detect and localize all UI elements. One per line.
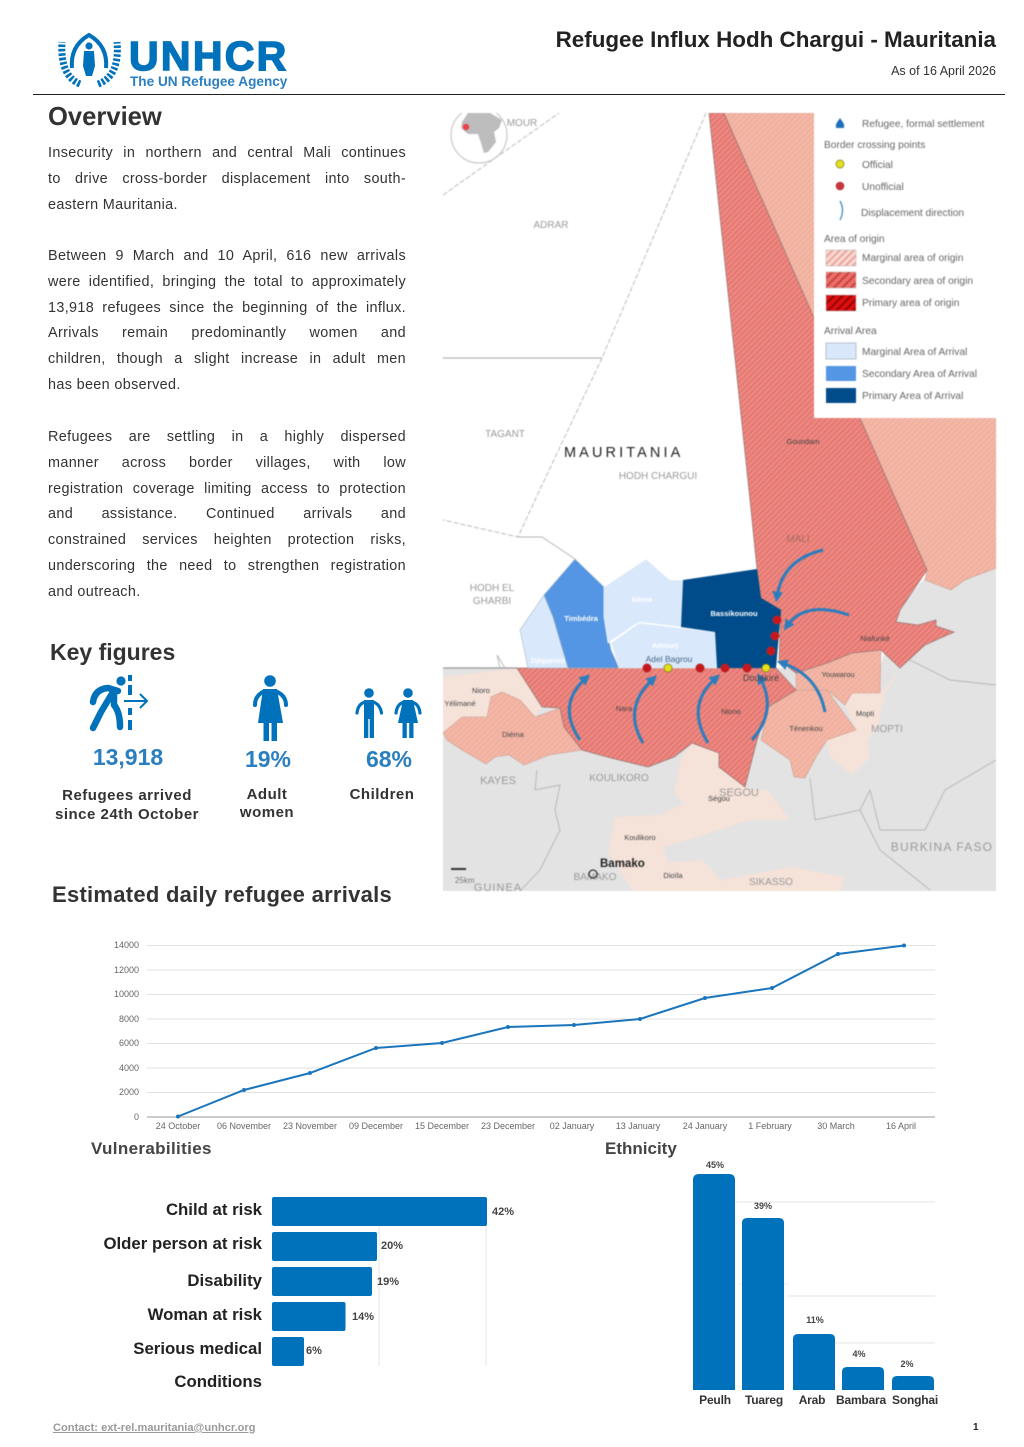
line chart: estimated daily arrivals: 09 December — [349, 1121, 403, 1131]
bar chart: vulnerabilities: Disability — [187, 1271, 263, 1290]
map: unofficial crossing points — [643, 616, 781, 672]
bar chart: vulnerabilities: 42% — [492, 1206, 514, 1218]
bar chart: ethnicity: Songhai — [892, 1393, 938, 1407]
map: Yélimané — [444, 699, 476, 708]
map: Diéma — [502, 730, 525, 739]
figure: 19%: 19% — [245, 746, 291, 772]
bar chart: vulnerabilities: Serious medical — [133, 1339, 262, 1358]
bar chart: ethnicity: Peulh — [699, 1393, 731, 1407]
bar chart: vulnerabilities: Woman at risk — [148, 1305, 263, 1324]
icon: children — [355, 688, 422, 738]
map: Ténenkou — [789, 724, 823, 733]
map legend: Primary area of origin — [862, 298, 959, 309]
text: overview paragraph 2: children, though a slight increase in adult men — [48, 351, 406, 367]
bar chart: vulnerabilities: 6% — [306, 1345, 322, 1357]
line chart: estimated daily arrivals: 12000 — [114, 965, 139, 975]
label: adult women: Adult — [247, 786, 287, 803]
line chart: estimated daily arrivals: 6000 — [119, 1038, 139, 1048]
map: Douékiré — [743, 673, 779, 683]
bar chart: ethnicity: 45% — [706, 1160, 724, 1170]
map: Dioïla — [663, 871, 683, 880]
map legend: Marginal Area of Arrival — [862, 347, 967, 358]
bar chart: vulnerabilities: Older person at risk — [103, 1234, 263, 1253]
map: place labels: GHARBI — [473, 596, 511, 607]
line chart: estimated daily arrivals: 1 February — [748, 1121, 792, 1131]
text: overview paragraph 1: Insecurity in northern and central Mali continues — [48, 145, 406, 161]
map: place labels: SEGOU — [719, 787, 759, 799]
map: Nioro — [472, 686, 490, 695]
map legend: Official — [862, 160, 893, 171]
heading: overview: Overview — [48, 103, 162, 131]
text: overview paragraph 3: registration coverage limiting access to protection — [48, 480, 406, 496]
heading: estimated daily refugee arrivals: Estimated daily refugee arrivals — [52, 882, 392, 907]
label: refugees arrived: since 24th October — [55, 806, 199, 823]
text: overview paragraph 3: and outreach. — [48, 584, 141, 600]
map: Bamako marker — [589, 858, 645, 878]
map: Timbédra — [564, 614, 599, 623]
footer: contact: Contact: ext-rel.mauritania@unhcr.org — [53, 1422, 256, 1434]
map: place labels: SIKASSO — [749, 877, 793, 888]
label: refugees arrived — [55, 787, 199, 823]
map: place labels: KOULIKORO — [589, 773, 649, 784]
map legend: Secondary Area of Arrival — [862, 369, 977, 380]
map: boundaries — [443, 113, 996, 891]
line chart: estimated daily arrivals: 24 October — [156, 1121, 200, 1131]
line chart: estimated daily arrivals: 8000 — [119, 1014, 139, 1024]
bar chart: ethnicity: Bambara — [836, 1393, 886, 1407]
heading: key figures: Key figures — [50, 639, 175, 665]
map: place labels: MOUR — [507, 118, 537, 129]
map: arrival areas — [520, 595, 568, 668]
line chart: estimated daily arrivals: 2000 — [119, 1087, 139, 1097]
text: overview paragraph 3: constrained services heighten protection risks, — [48, 532, 406, 548]
map: displacement arrows — [569, 550, 849, 743]
map: Néma — [632, 595, 653, 604]
line chart: estimated daily arrivals: 10000 — [114, 989, 139, 999]
line chart: estimated daily arrivals: 24 January — [683, 1121, 728, 1131]
map legend — [814, 113, 996, 418]
map: Koulikoro — [624, 833, 656, 842]
line chart: estimated daily arrivals: 16 April — [886, 1121, 916, 1131]
text: overview paragraph 3: Refugees are settling in a highly dispersed — [48, 429, 406, 445]
map: place labels: GUINEA — [474, 882, 522, 894]
map: Adel Bagrou — [646, 654, 693, 664]
icon: refugee crossing border — [90, 675, 148, 732]
bar chart: ethnicity — [693, 1160, 938, 1407]
line chart: estimated daily arrivals: 23 December — [481, 1121, 535, 1131]
date: As of 16 April 2026 — [891, 64, 996, 78]
map: place labels: MOPTI — [871, 724, 903, 735]
title: Refugee Influx Hodh Chargui - Mauritania — [556, 27, 996, 52]
logo tagline: The UN Refugee Agency — [130, 74, 287, 89]
line chart: estimated daily arrivals: 0 — [134, 1112, 139, 1122]
text: overview paragraph 1: eastern Mauritania. — [48, 196, 178, 212]
icon: woman — [253, 675, 288, 741]
figure: 13,918: 13,918 — [93, 744, 163, 770]
text: overview paragraph 3: and assistance. Continued arrivals and — [48, 506, 406, 522]
bar chart: vulnerabilities: Conditions — [174, 1372, 262, 1391]
text: overview paragraph 2: were identified, bringing the total to approximately — [48, 274, 406, 290]
logo: UNHCR — [58, 32, 289, 89]
line chart: estimated daily arrivals: 15 December — [415, 1121, 469, 1131]
bar chart: vulnerabilities: 14% — [352, 1311, 374, 1323]
map legend: Area of origin — [824, 234, 885, 245]
map: Ségou — [708, 794, 730, 803]
text: overview paragraph 1: to drive cross-border displacement into south- — [48, 171, 406, 187]
map: place labels: TAGANT — [485, 429, 525, 440]
bar chart: vulnerabilities — [103, 1197, 514, 1391]
map: place labels: BAMAKO — [574, 872, 617, 883]
map: official crossing points — [664, 664, 770, 672]
line chart: estimated daily arrivals — [114, 940, 935, 1131]
map: Bassikounou — [710, 609, 758, 618]
map: place labels: KAYES — [480, 775, 516, 787]
text: overview paragraph 2 — [48, 248, 406, 393]
map: locator globe — [451, 107, 507, 163]
label: refugees arrived: Refugees arrived — [62, 787, 192, 804]
line chart: estimated daily arrivals: 06 November — [217, 1121, 271, 1131]
bar chart: ethnicity: 4% — [852, 1349, 866, 1359]
map — [442, 112, 997, 892]
map legend: Primary Area of Arrival — [862, 391, 963, 402]
map: scale bar — [451, 868, 475, 885]
map: place labels — [470, 118, 993, 894]
line chart: estimated daily arrivals: 13 January — [616, 1121, 661, 1131]
map legend: Border crossing points — [824, 140, 925, 151]
map: place labels: HODH EL — [470, 583, 515, 594]
bar chart: ethnicity: Tuareg — [745, 1393, 783, 1407]
map legend: Secondary area of origin — [862, 276, 973, 287]
map: place labels: BURKINA FASO — [891, 840, 993, 854]
text: overview paragraph 2: has been observed. — [48, 377, 181, 393]
label: adult women — [240, 786, 294, 821]
map: Goundam — [787, 437, 819, 446]
map: Mopti — [856, 709, 875, 718]
label: children: Children — [350, 786, 414, 803]
map: Youwarou — [821, 670, 855, 679]
footer: page number: 1 — [973, 1422, 979, 1433]
map: place labels: HODH CHARGUI — [619, 471, 697, 482]
map: grey neighbouring land — [443, 560, 996, 891]
map: Amourj — [652, 641, 678, 650]
map: Bamako marker: Bamako — [600, 858, 645, 870]
map: secondary area of origin — [517, 113, 954, 787]
figure: 68%: 68% — [366, 746, 412, 772]
icon: UNHCR emblem — [58, 32, 121, 88]
bar chart: ethnicity: Arab — [799, 1393, 825, 1407]
map: scale bar: 25km — [455, 876, 475, 885]
map: Niafunké — [860, 634, 890, 643]
bar chart: ethnicity: 2% — [900, 1359, 914, 1369]
text: overview paragraph 3 — [48, 429, 406, 600]
map: place labels: ADRAR — [533, 220, 569, 231]
text: overview paragraph 1 — [48, 145, 406, 212]
label: adult women: women — [240, 804, 294, 821]
heading: ethnicity: Ethnicity — [605, 1139, 677, 1158]
text: overview paragraph 2: Between 9 March and 10 April, 616 new arrivals — [48, 248, 406, 264]
map legend: Displacement direction — [861, 208, 964, 219]
map: Djiguenni — [531, 656, 565, 665]
line chart: estimated daily arrivals: 02 January — [550, 1121, 595, 1131]
bar chart: vulnerabilities: 20% — [381, 1240, 403, 1252]
map legend: Marginal area of origin — [862, 253, 963, 264]
bar chart: vulnerabilities: 19% — [377, 1276, 399, 1288]
line chart: estimated daily arrivals: 4000 — [119, 1063, 139, 1073]
map: light peach regions — [443, 668, 900, 891]
text: overview paragraph 2: Arrivals remain predominantly women and — [48, 325, 406, 341]
text: overview paragraph 2: 13,918 refugees since the beginning of the influx. — [48, 300, 406, 316]
text: overview paragraph 3: underscoring the need to strengthen registration — [48, 558, 406, 574]
map legend: Unofficial — [862, 182, 904, 193]
map: MAURITANIA — [564, 445, 683, 461]
line chart: estimated daily arrivals: 30 March — [817, 1121, 855, 1131]
logo wordmark: UNHCR — [129, 33, 289, 79]
map: marginal area of origin — [443, 113, 996, 778]
bar chart: ethnicity: 11% — [806, 1315, 824, 1325]
map: place labels: MALI — [786, 534, 810, 545]
text: overview paragraph 3: manner across border villages, with low — [48, 455, 406, 471]
map legend: Refugee, formal settlement — [862, 119, 984, 130]
bar chart: vulnerabilities: Child at risk — [166, 1200, 263, 1219]
line chart: estimated daily arrivals: 14000 — [114, 940, 139, 950]
heading: vulnerabilities: Vulnerabilities — [91, 1139, 212, 1158]
map: Niono — [721, 707, 741, 716]
map: Nara — [616, 704, 633, 713]
bar chart: ethnicity: 39% — [754, 1201, 772, 1211]
legend: settlement icon — [836, 118, 844, 128]
map legend: Arrival Area — [824, 326, 877, 337]
line chart: estimated daily arrivals: 23 November — [283, 1121, 337, 1131]
